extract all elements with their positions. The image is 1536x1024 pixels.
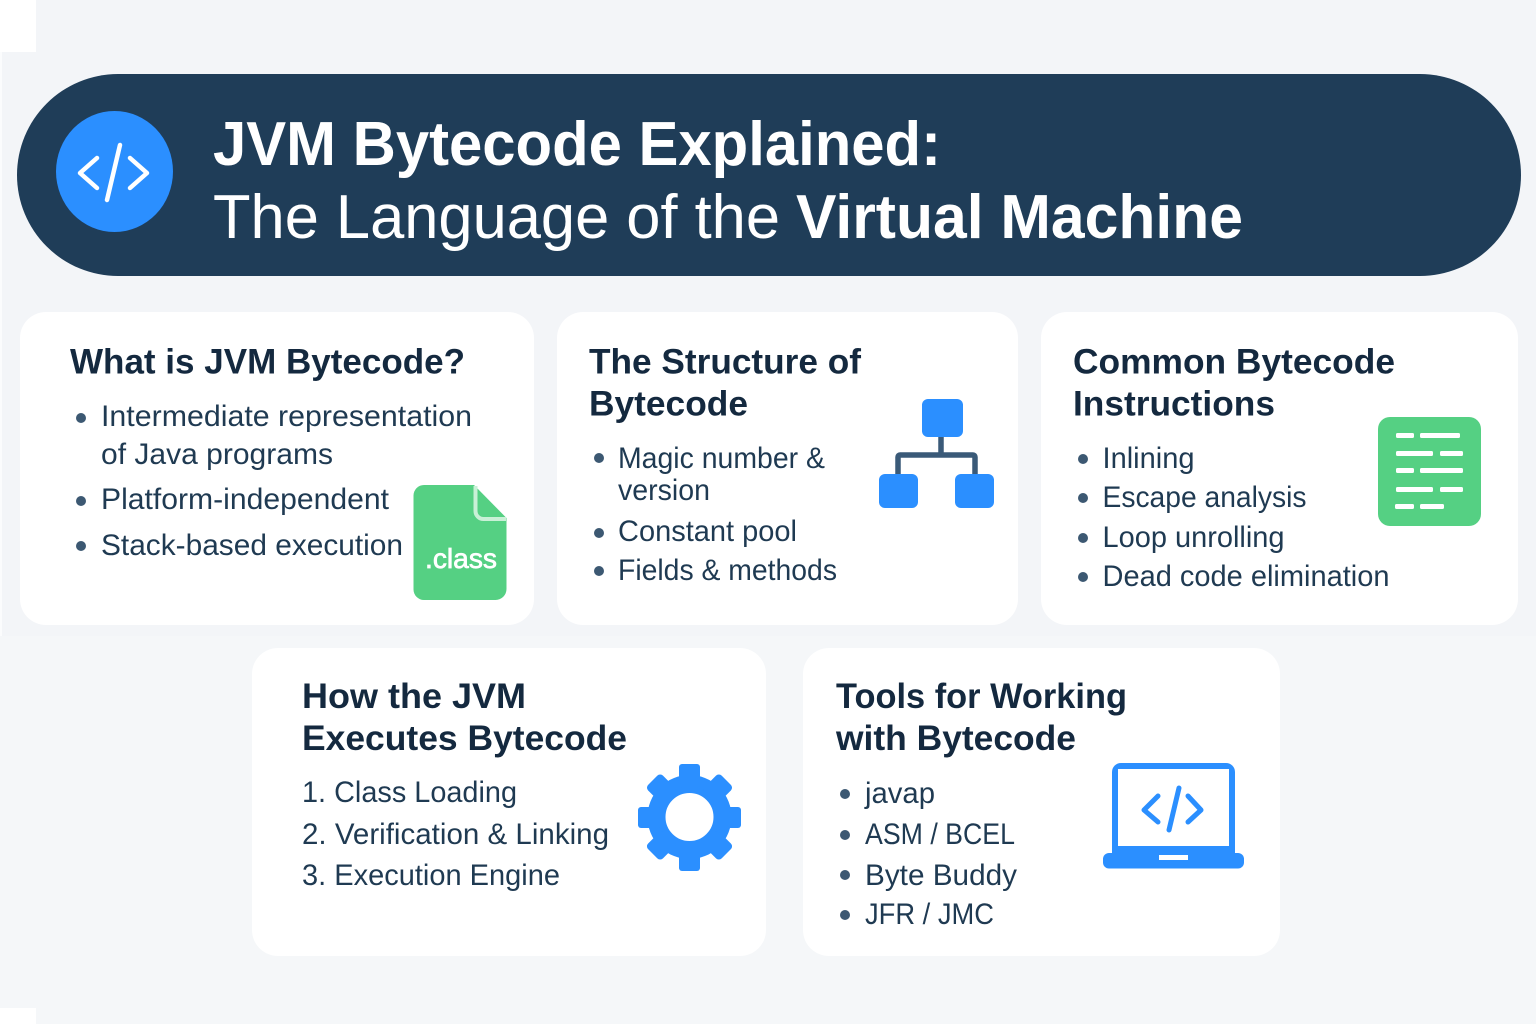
- numbered list: 3. Execution Engine: [302, 859, 560, 892]
- heading: with Bytecode: [835, 719, 1076, 758]
- heading: Bytecode: [589, 384, 748, 424]
- bullet list: ASM / BCEL: [865, 818, 1015, 851]
- heading: Instructions: [1073, 384, 1275, 424]
- icon: code symbol in circle: [56, 111, 173, 232]
- icon: laptop with code: [1103, 763, 1244, 868]
- heading: [589, 342, 861, 424]
- panel: what is JVM bytecode: [20, 312, 534, 625]
- panel: common bytecode instructions: [1041, 312, 1518, 625]
- bullet list: Constant pool: [618, 515, 797, 548]
- heading: [302, 677, 627, 758]
- bullet list: Byte Buddy: [865, 859, 1017, 892]
- title: Virtual Machine: [796, 183, 1243, 252]
- bullet list: Loop unrolling: [1102, 521, 1284, 554]
- title banner: [17, 74, 1521, 276]
- heading: The Structure of: [589, 342, 861, 382]
- title: [213, 110, 1243, 252]
- numbered list: 1. Class Loading: [302, 776, 517, 809]
- icon: class file: [414, 485, 506, 600]
- title: The Language of the: [213, 183, 780, 252]
- panel: structure of bytecode: [557, 312, 1018, 625]
- numbered list: [302, 776, 609, 892]
- heading: Executes Bytecode: [302, 719, 627, 758]
- bullet list: Fields & methods: [618, 554, 837, 587]
- bullet list: Intermediate representation: [101, 400, 472, 433]
- bullet list: Stack-based execution: [101, 529, 403, 562]
- icon: bytecode document: [1378, 417, 1481, 526]
- heading: Tools for Working: [836, 677, 1127, 716]
- icon: hierarchy tree: [879, 399, 994, 508]
- panel: tools for working with bytecode: [803, 648, 1280, 956]
- bullet list: [1078, 442, 1390, 593]
- bullet list: [76, 400, 472, 562]
- bullet list: [840, 777, 1017, 931]
- icon: class file: .class: [425, 543, 497, 574]
- bullet list: of Java programs: [101, 438, 333, 471]
- title: JVM Bytecode Explained:: [213, 110, 941, 179]
- bullet list: Platform-independent: [101, 483, 390, 516]
- icon: gear: [638, 764, 741, 871]
- numbered list: 2. Verification & Linking: [302, 818, 609, 851]
- bullet list: javap: [864, 777, 935, 810]
- bullet list: JFR / JMC: [865, 898, 994, 931]
- panel: how the JVM executes bytecode: [252, 648, 766, 956]
- heading: [835, 677, 1127, 758]
- heading: [1073, 342, 1395, 424]
- heading: Common Bytecode: [1073, 342, 1395, 382]
- bullet list: Inlining: [1102, 442, 1194, 475]
- heading: What is JVM Bytecode?: [70, 342, 465, 382]
- bullet list: version: [618, 474, 710, 507]
- bullet list: Escape analysis: [1102, 481, 1306, 514]
- bullet list: Magic number &: [618, 442, 825, 475]
- bullet list: [594, 442, 837, 587]
- bullet list: Dead code elimination: [1102, 560, 1390, 593]
- heading: How the JVM: [302, 677, 526, 716]
